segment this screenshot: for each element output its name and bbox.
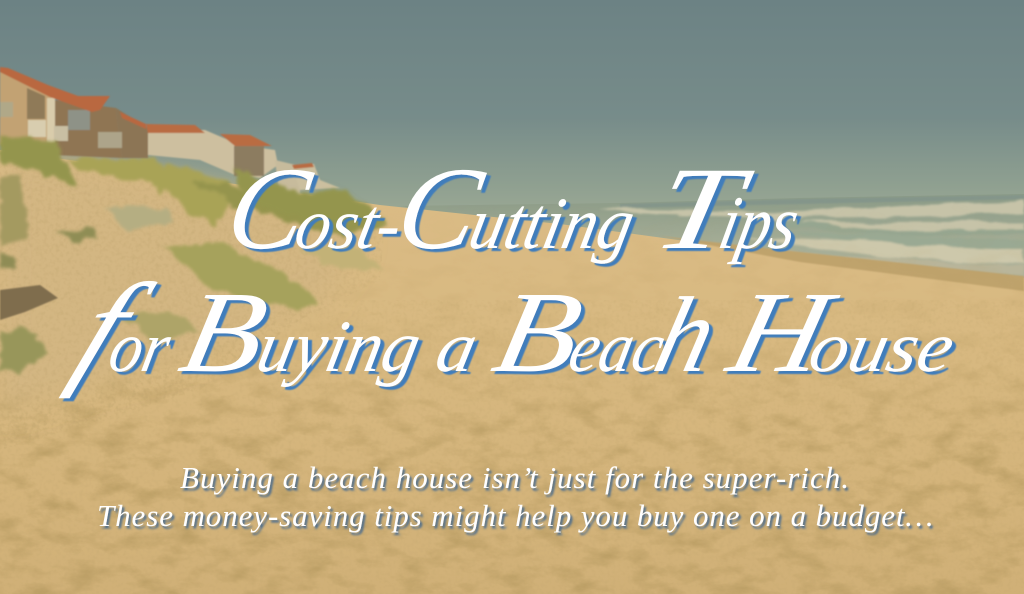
house: large brick house	[0, 67, 148, 158]
title line 2: uying	[250, 306, 428, 388]
title line 2: a	[430, 307, 485, 387]
title line 1: ips	[712, 181, 806, 265]
title line 2: f	[57, 257, 169, 399]
background: beach sand	[0, 150, 1024, 594]
title line 1	[217, 143, 806, 274]
title line 2: B	[484, 268, 593, 397]
subtitle	[97, 460, 933, 533]
title line 2: ouse	[803, 307, 962, 387]
title line 2	[57, 257, 962, 399]
subtitle line 1: Buying a beach house isn’t just for the super-rich.	[180, 460, 849, 495]
title	[57, 143, 962, 399]
background: sky	[0, 0, 1024, 215]
title line 2: H	[715, 269, 848, 397]
subtitle line 2: These money-saving tips might help you buy one on a budget…	[97, 498, 933, 533]
title line 2: B	[171, 268, 278, 397]
title line 1: C	[387, 143, 494, 274]
title line 2: eac	[563, 307, 672, 387]
title line 2: or	[103, 307, 178, 387]
title line 2: h	[644, 274, 728, 395]
background: sea with waves	[400, 194, 1024, 295]
title line 1: C	[217, 143, 322, 274]
house: white houses	[146, 124, 340, 200]
title line 1: T	[645, 143, 761, 274]
background: beach houses	[0, 67, 340, 200]
background: dune with vegetation	[0, 148, 387, 401]
title line 1: utting	[462, 183, 642, 265]
title line 1: ost-	[289, 184, 410, 264]
background: near vegetation on crest	[0, 138, 390, 225]
